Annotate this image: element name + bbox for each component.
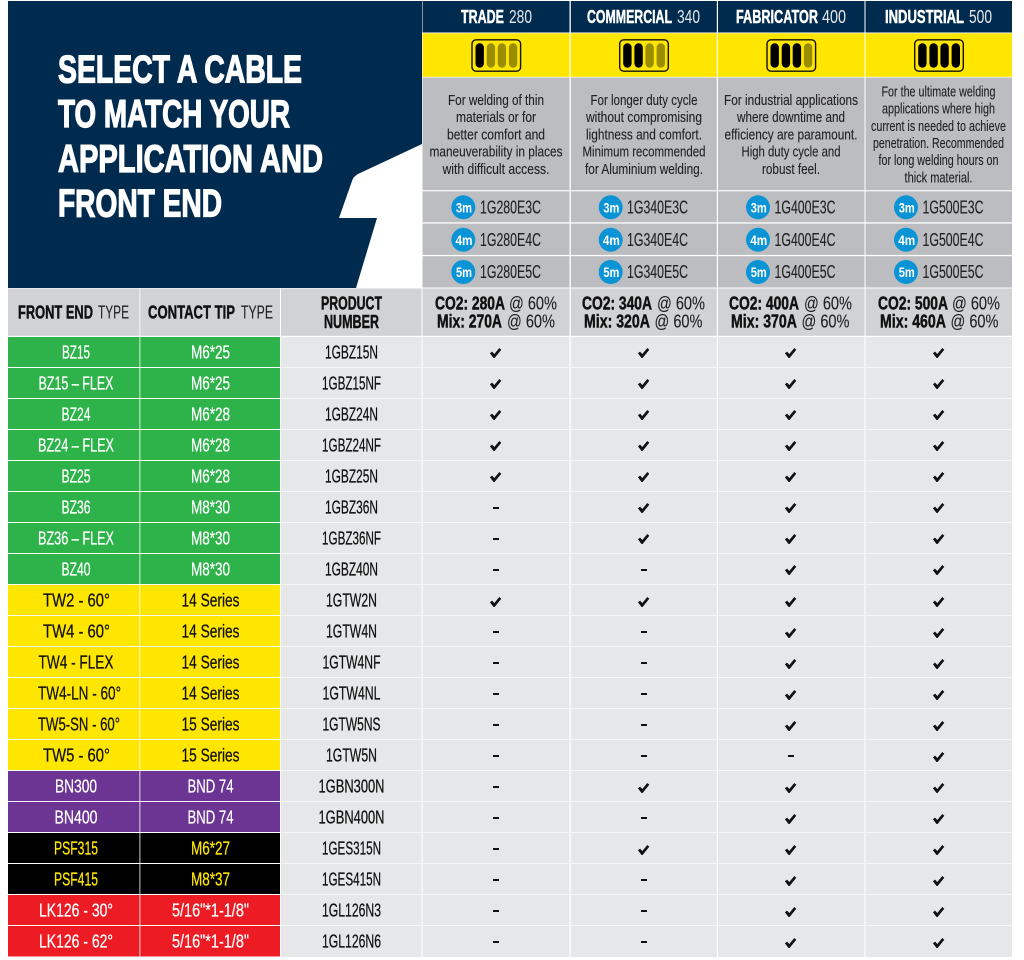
duty rating: Industrial: @ 60% bbox=[952, 293, 1000, 313]
row: TW5 - 60 bbox=[8, 740, 944, 770]
row: BZ25 bbox=[8, 461, 944, 491]
icon: rating 3 of 4 bbox=[718, 33, 864, 77]
cable lengths: Trade: 1G280E5C bbox=[480, 262, 541, 282]
row: TW4-LN - 60: 1GTW4NL bbox=[322, 683, 380, 703]
row: TW4 - 60: TW4 - 60° bbox=[43, 621, 110, 641]
row: BZ24 bbox=[8, 399, 944, 429]
description: Industrial bbox=[866, 78, 1012, 190]
cable lengths: Commercial: 1G340E3C bbox=[627, 198, 688, 218]
row: BN300 bbox=[8, 771, 944, 801]
cable lengths: Fabricator: 3m bbox=[751, 199, 767, 215]
title: SELECT A CABLE bbox=[58, 48, 302, 91]
row: BZ40: 1GBZ40N bbox=[325, 559, 378, 579]
title bbox=[58, 48, 323, 225]
row: TW4 - 60 bbox=[8, 616, 944, 646]
heading: Trade 280: TRADE bbox=[461, 7, 504, 27]
row: BZ36: BZ36 bbox=[62, 497, 90, 517]
row: TW4-LN - 60: 14 Series bbox=[182, 683, 240, 703]
row: BN400: BND 74 bbox=[188, 807, 234, 827]
cable lengths: Trade: 5m bbox=[456, 264, 472, 280]
row: TW4 - FLEX bbox=[8, 647, 944, 677]
table header: contact tip type bbox=[140, 288, 280, 336]
cable lengths: Commercial: 3m bbox=[603, 199, 619, 215]
table header: front end type: FRONT END bbox=[18, 302, 93, 322]
description: Trade: For welding of thin bbox=[448, 92, 544, 109]
row: BZ15 bbox=[8, 337, 944, 367]
duty rating: Fabricator: @ 60% bbox=[804, 293, 852, 313]
duty rating: Fabricator bbox=[718, 288, 864, 336]
row: BZ15: BZ15 bbox=[62, 342, 90, 362]
cable lengths: Fabricator: 1G400E5C bbox=[774, 262, 836, 282]
cable lengths: Trade bbox=[422, 191, 570, 288]
cable lengths: Fabricator: 1G400E4C bbox=[774, 230, 836, 250]
row: BZ15 - FLEX: 1GBZ15NF bbox=[322, 373, 381, 393]
description: Trade: better comfort and bbox=[447, 126, 545, 143]
icon: rating 1 of 4 bbox=[422, 33, 570, 77]
table header: product number: PRODUCT bbox=[321, 293, 382, 313]
description: Industrial: thick material. bbox=[904, 169, 972, 186]
row: BZ24 - FLEX bbox=[8, 430, 944, 460]
row: TW5 - 60: 15 Series bbox=[182, 745, 240, 765]
row: LK126 - 62: 1GL126N6 bbox=[322, 931, 381, 951]
row: BZ24 - FLEX: 1GBZ24NF bbox=[322, 435, 381, 455]
row: BZ36 bbox=[8, 492, 944, 522]
heading: Commercial 340: 340 bbox=[677, 7, 700, 27]
row: BZ24: BZ24 bbox=[62, 404, 90, 424]
row: BZ40: BZ40 bbox=[62, 559, 90, 579]
row: TW2 - 60: TW2 - 60° bbox=[43, 590, 110, 610]
row: BN400 bbox=[8, 802, 944, 832]
row: BN400: 1GBN400N bbox=[318, 807, 384, 827]
row: PSF415 bbox=[8, 864, 944, 894]
row: BZ40 bbox=[8, 554, 944, 584]
row: BN300: BN300 bbox=[55, 776, 97, 796]
row: LK126 - 62 bbox=[8, 926, 944, 956]
cable lengths: Trade: 1G280E4C bbox=[480, 230, 541, 250]
duty rating: Industrial: Mix: 460A bbox=[880, 312, 946, 332]
row: BZ24 - FLEX: M6*28 bbox=[191, 435, 230, 455]
row: BZ36 - FLEX bbox=[8, 523, 944, 553]
description: Fabricator bbox=[718, 78, 864, 190]
cable lengths: Fabricator: 1G400E3C bbox=[774, 198, 836, 218]
heading: Industrial 500 bbox=[866, 1, 1012, 32]
duty rating: Fabricator: @ 60% bbox=[802, 312, 850, 332]
column: Commercial 340 bbox=[571, 1, 717, 336]
description: Trade: materials or for bbox=[456, 109, 536, 126]
cable lengths: Fabricator: 5m bbox=[751, 264, 767, 280]
row: TW5-SN - 60: 1GTW5NS bbox=[322, 714, 380, 734]
duty rating: Commercial bbox=[571, 288, 717, 336]
row separators bbox=[281, 367, 1012, 926]
cable lengths: Industrial: 5m bbox=[899, 264, 915, 280]
row: TW5-SN - 60 bbox=[8, 709, 944, 739]
row: LK126 - 30: LK126 - 30° bbox=[39, 900, 113, 920]
row: PSF315: 1GES315N bbox=[322, 838, 381, 858]
row: TW5 - 60: 1GTW5N bbox=[326, 745, 377, 765]
heading: Industrial 500: 500 bbox=[969, 7, 992, 27]
duty rating: Trade: @ 60% bbox=[507, 312, 555, 332]
row: LK126 - 30: 5/16"*1-1/8" bbox=[172, 900, 249, 920]
duty rating: Fabricator: CO2: 400A bbox=[729, 293, 799, 313]
row: BZ24: M6*28 bbox=[191, 404, 230, 424]
row: TW5-SN - 60: 15 Series bbox=[182, 714, 240, 734]
description: Fabricator: For industrial applications bbox=[724, 92, 858, 109]
cable lengths: Trade: 1G280E3C bbox=[480, 198, 541, 218]
description: Fabricator: efficiency are paramount. bbox=[724, 126, 858, 143]
heading: Industrial 500: INDUSTRIAL bbox=[885, 7, 964, 27]
row: BZ15 - FLEX: M6*25 bbox=[191, 373, 230, 393]
column: Fabricator 400 bbox=[718, 1, 864, 336]
row: LK126 - 62: LK126 - 62° bbox=[39, 931, 113, 951]
table header: product number bbox=[281, 288, 422, 336]
description: Fabricator: where downtime and bbox=[736, 109, 845, 126]
duty rating: Trade: Mix: 270A bbox=[437, 312, 502, 332]
description: Commercial: Minimum recommended bbox=[582, 144, 706, 161]
cable lengths: Trade: 3m bbox=[456, 199, 472, 215]
cable lengths: Trade: 4m bbox=[456, 232, 472, 248]
row: LK126 - 30: 1GL126N3 bbox=[322, 900, 381, 920]
cable lengths: Industrial: 1G500E5C bbox=[922, 262, 984, 282]
icon: rating 4 of 4 bbox=[866, 33, 1012, 77]
row: TW4-LN - 60 bbox=[8, 678, 944, 708]
description: Commercial: without compromising bbox=[585, 109, 702, 126]
row: PSF315: PSF315 bbox=[54, 838, 98, 858]
row: BZ15: 1GBZ15N bbox=[325, 342, 378, 362]
icon: rating 2 of 4 bbox=[571, 33, 717, 77]
title: TO MATCH YOUR bbox=[58, 93, 290, 136]
row: BN300: 1GBN300N bbox=[318, 776, 384, 796]
table header: front end type: TYPE bbox=[98, 302, 129, 322]
heading: Fabricator 400: FABRICATOR bbox=[736, 7, 818, 27]
table header: contact tip type: TYPE bbox=[241, 302, 273, 322]
description: Trade bbox=[422, 78, 570, 190]
description: Commercial: For longer duty cycle bbox=[590, 92, 698, 109]
row: BZ25: 1GBZ25N bbox=[325, 466, 378, 486]
heading: Commercial 340: COMMERCIAL bbox=[587, 7, 672, 27]
row: BZ15: M6*25 bbox=[191, 342, 230, 362]
cable lengths: Commercial: 4m bbox=[603, 232, 620, 248]
duty rating: Commercial: @ 60% bbox=[657, 293, 705, 313]
row: TW4 - 60: 14 Series bbox=[182, 621, 240, 641]
duty rating: Industrial: CO2: 500A bbox=[878, 293, 948, 313]
row: TW4 - FLEX: 1GTW4NF bbox=[322, 652, 380, 672]
row: BZ15 - FLEX bbox=[8, 368, 944, 398]
heading: Trade 280 bbox=[422, 1, 570, 32]
row: BZ24 - FLEX: BZ24 – FLEX bbox=[38, 435, 114, 455]
title: APPLICATION AND bbox=[58, 138, 323, 181]
cable lengths: Commercial: 5m bbox=[603, 264, 619, 280]
duty rating: Trade: @ 60% bbox=[509, 293, 557, 313]
heading: Commercial 340 bbox=[571, 1, 717, 32]
row: PSF315 bbox=[8, 833, 944, 863]
column: Trade 280 bbox=[422, 1, 570, 336]
row: BZ25: M6*28 bbox=[191, 466, 230, 486]
cable lengths: Fabricator bbox=[718, 191, 864, 288]
title panel bbox=[8, 1, 422, 288]
description: Trade: with difficult access. bbox=[442, 161, 550, 178]
row: PSF415: 1GES415N bbox=[322, 869, 381, 889]
row: BZ40: M8*30 bbox=[191, 559, 230, 579]
cable lengths: Commercial: 1G340E5C bbox=[627, 262, 688, 282]
cable lengths: Fabricator: 4m bbox=[750, 232, 767, 248]
row: BZ36 - FLEX: M8*30 bbox=[191, 528, 230, 548]
column: Industrial 500 bbox=[866, 1, 1012, 336]
description: Fabricator: High duty cycle and bbox=[742, 144, 840, 161]
description: Commercial: lightness and comfort. bbox=[586, 126, 702, 143]
row: PSF415: M8*37 bbox=[191, 869, 230, 889]
row: BZ36 - FLEX: BZ36 – FLEX bbox=[38, 528, 114, 548]
row: TW4 - FLEX: TW4 - FLEX bbox=[38, 652, 114, 672]
row: PSF315: M6*27 bbox=[191, 838, 230, 858]
cable lengths: Industrial: 1G500E4C bbox=[922, 230, 984, 250]
row: BN400: BN400 bbox=[54, 807, 98, 827]
heading: Fabricator 400: 400 bbox=[822, 7, 846, 27]
row: TW2 - 60 bbox=[8, 585, 944, 615]
description: Fabricator: robust feel. bbox=[762, 161, 820, 178]
row: LK126 - 30 bbox=[8, 895, 944, 925]
cable lengths: Commercial bbox=[571, 191, 717, 288]
duty rating: Trade: CO2: 280A bbox=[435, 293, 505, 313]
duty rating: Industrial: @ 60% bbox=[950, 312, 998, 332]
row: BZ25: BZ25 bbox=[62, 466, 90, 486]
row: TW2 - 60: 14 Series bbox=[182, 590, 240, 610]
table header: product number: NUMBER bbox=[324, 312, 379, 332]
duty rating: Commercial: Mix: 320A bbox=[584, 312, 650, 332]
cable lengths: Commercial: 1G340E4C bbox=[627, 230, 688, 250]
row: BZ15 - FLEX: BZ15 – FLEX bbox=[38, 373, 114, 393]
description: Commercial: for Aluminium welding. bbox=[585, 161, 703, 178]
row: TW4-LN - 60: TW4-LN - 60° bbox=[38, 683, 121, 703]
row: TW2 - 60: 1GTW2N bbox=[326, 590, 377, 610]
row background cells for product and cable columns bbox=[281, 337, 1012, 957]
cable lengths: Industrial: 3m bbox=[899, 199, 915, 215]
table header: front end type bbox=[8, 288, 140, 336]
table header: contact tip type: CONTACT TIP bbox=[148, 302, 235, 322]
duty rating: Commercial: @ 60% bbox=[654, 312, 702, 332]
cable lengths: Industrial: 1G500E3C bbox=[922, 198, 984, 218]
row: TW5 - 60: TW5 - 60° bbox=[43, 745, 110, 765]
row: TW5-SN - 60: TW5-SN - 60° bbox=[38, 714, 120, 734]
cable lengths: Industrial bbox=[866, 191, 1012, 288]
heading: Fabricator 400 bbox=[718, 1, 864, 32]
duty rating: Industrial bbox=[866, 288, 1012, 336]
row: LK126 - 62: 5/16"*1-1/8" bbox=[172, 931, 249, 951]
row: BZ24: 1GBZ24N bbox=[325, 404, 378, 424]
row: BN300: BND 74 bbox=[188, 776, 234, 796]
duty rating: Commercial: CO2: 340A bbox=[582, 293, 652, 313]
description: Commercial bbox=[571, 78, 717, 190]
row: PSF415: PSF415 bbox=[54, 869, 98, 889]
heading: Trade 280: 280 bbox=[509, 7, 532, 27]
row: BZ36: M8*30 bbox=[191, 497, 230, 517]
cable lengths: Industrial: 4m bbox=[898, 232, 915, 248]
duty rating: Fabricator: Mix: 370A bbox=[731, 312, 797, 332]
title: FRONT END bbox=[58, 182, 222, 225]
description: Trade: maneuverability in places bbox=[430, 144, 562, 161]
row: TW4 - 60: 1GTW4N bbox=[326, 621, 377, 641]
duty rating: Trade bbox=[422, 288, 570, 336]
row: BZ36 - FLEX: 1GBZ36NF bbox=[322, 528, 381, 548]
row: TW4 - FLEX: 14 Series bbox=[182, 652, 240, 672]
row: BZ36: 1GBZ36N bbox=[325, 497, 378, 517]
